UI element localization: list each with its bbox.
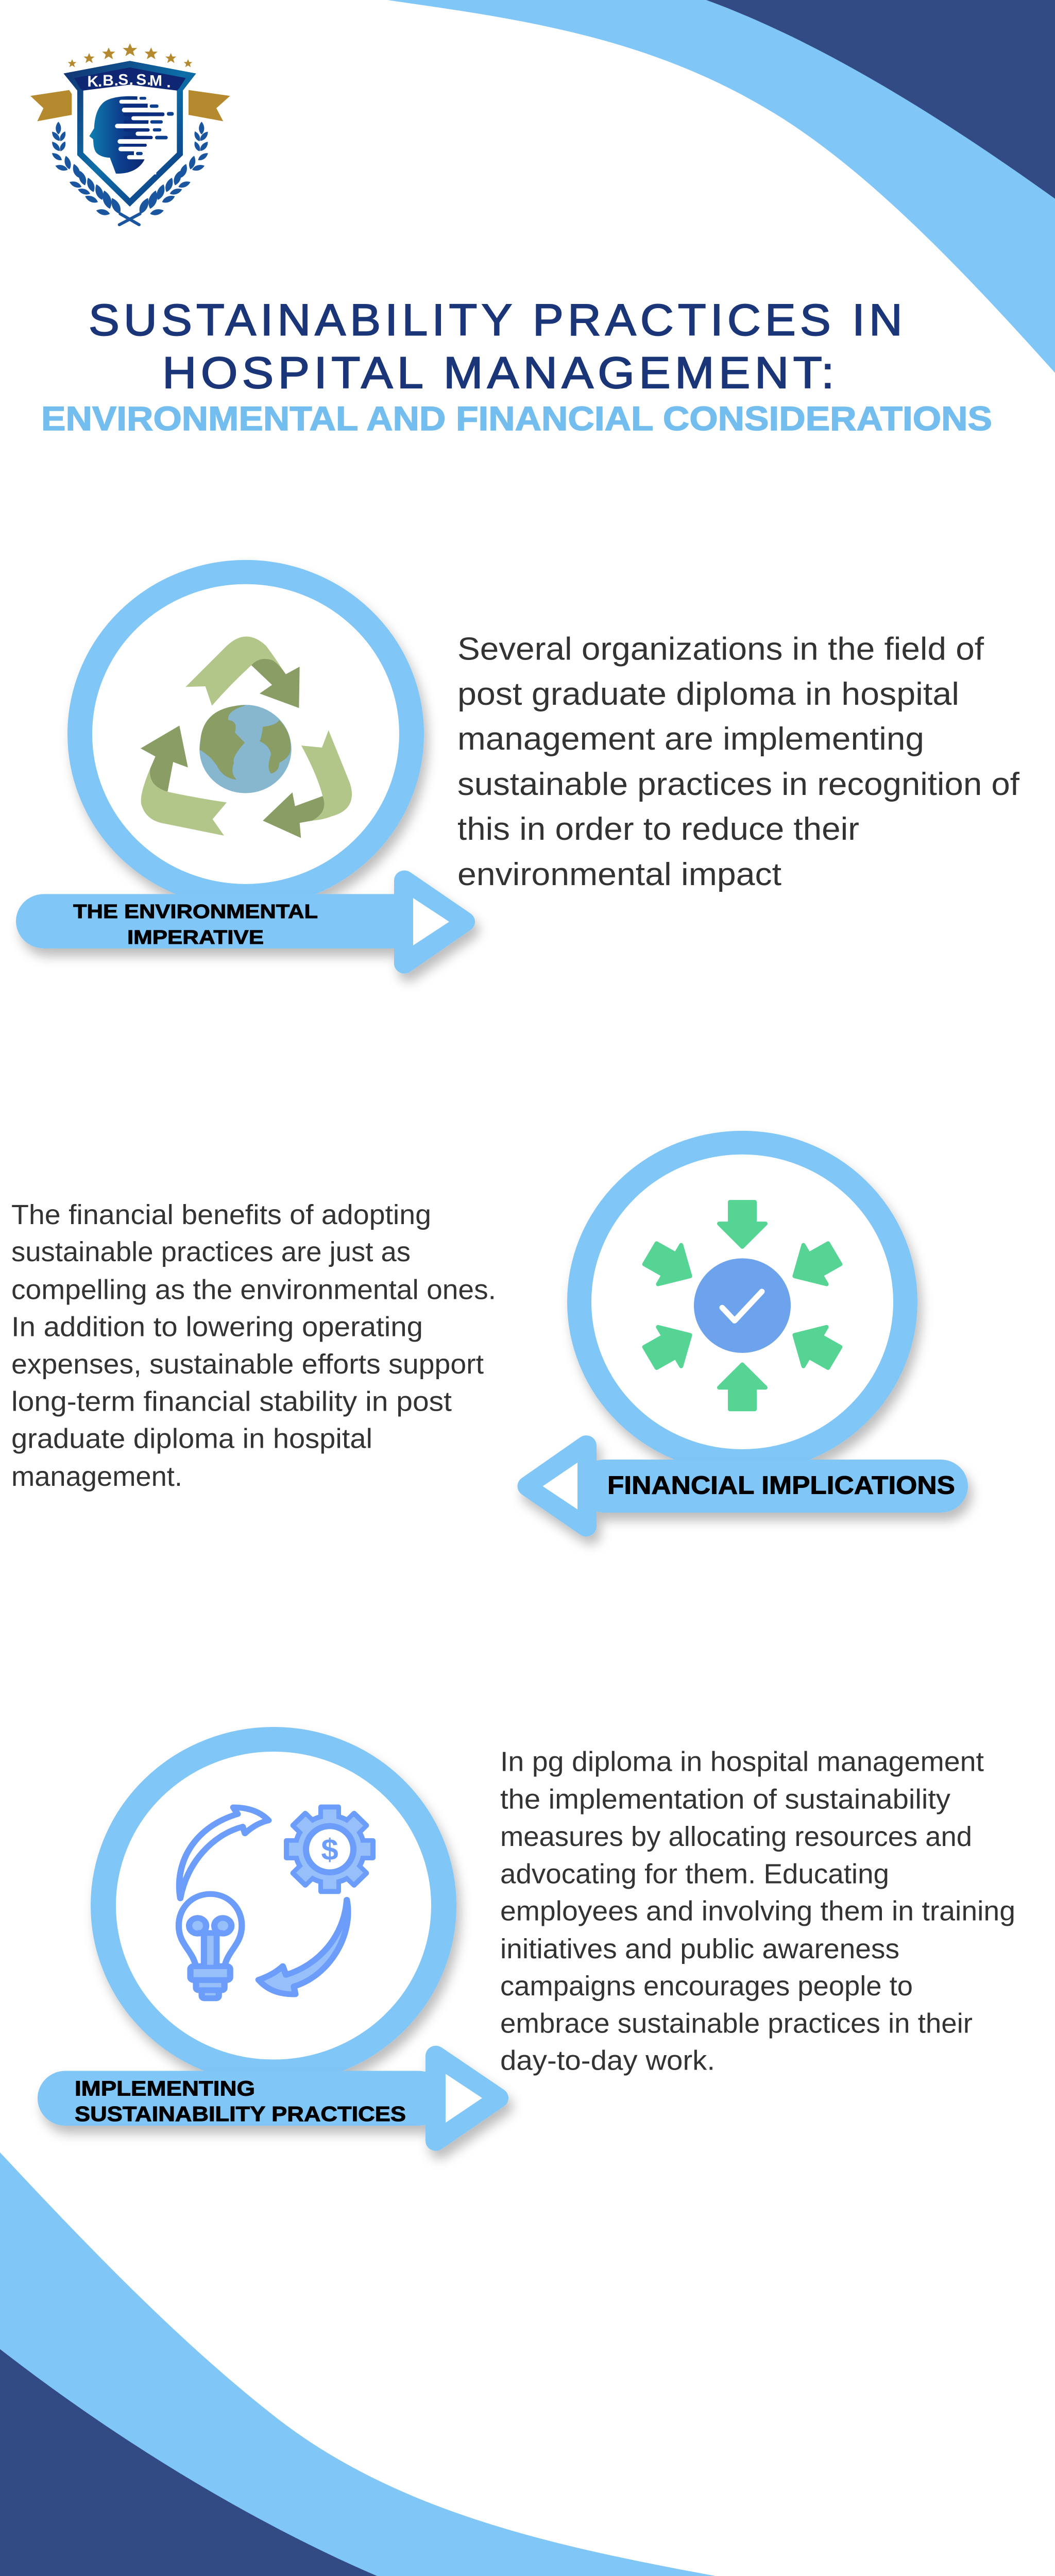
title: SUSTAINABILITY PRACTICES IN [89,295,907,345]
gear with dollar [284,1804,376,1894]
text block 2 [11,1199,496,1492]
circle frame 3 [103,1739,444,2072]
text block 1: environmental impact [457,856,781,892]
text block 3: advocating for them. Educating [500,1858,889,1889]
text block 2: long-term financial stability in post [11,1386,452,1417]
logo shield [63,61,196,207]
label 3 [75,2076,406,2126]
logo: K.B.S.S.M. crest [30,43,230,225]
label 3: SUSTAINABILITY PRACTICES [75,2102,406,2126]
text block 3: employees and involving them in training [500,1895,1015,1926]
text block 1 [457,631,1019,892]
cycle arrows [179,1807,348,1994]
icon: bulb, gear and cycle arrows [179,1804,376,1998]
icon: recycling globe [141,636,352,838]
text block 3: measures by allocating resources and [500,1821,972,1852]
text block 3: initiatives and public awareness [500,1933,899,1964]
text block 3: campaigns encourages people to [500,1971,913,2002]
logo laurel left [50,122,123,216]
text block 3: embrace sustainable practices in their [500,2008,973,2039]
text block 2: expenses, sustainable efforts support [11,1349,484,1380]
bottom-left corner waves [0,2153,716,2576]
text block 1: this in order to reduce their [457,811,859,847]
panel: implementing sustainability practices [38,1739,498,2141]
gear with dollar: $ [321,1833,338,1867]
panel: the environmental imperative [16,572,465,963]
title [89,295,907,398]
title: HOSPITAL MANAGEMENT: [162,348,839,398]
logo laurel right [137,122,210,216]
text block 2: management. [11,1461,182,1492]
text block 3: In pg diploma in hospital management [500,1746,984,1777]
circle frame 1 [80,572,412,896]
text block 1: Several organizations in the field of [457,631,984,667]
text block 3 [500,1746,1015,2076]
arrow banner 1 [16,880,465,963]
label 1 [73,901,318,948]
text block 2: graduate diploma in hospital [11,1423,372,1454]
text block 1: post graduate diploma in hospital [457,676,959,712]
text block 2: The financial benefits of adopting [11,1199,431,1230]
bulb [179,1894,242,1998]
subtitle: ENVIRONMENTAL AND FINANCIAL CONSIDERATIONS [41,400,992,438]
text block 2: In addition to lowering operating [11,1311,423,1343]
panel: financial implications [528,1143,968,1527]
label 2: FINANCIAL IMPLICATIONS [607,1471,955,1499]
icon: converging arrows with check [639,1202,846,1409]
logo stars [68,43,192,67]
text block 3: day-to-day work. [500,2045,715,2076]
top-right corner waves [387,0,1055,373]
logo wordmark: K.B.S.S.M. [87,72,171,91]
logo laurel crossing [120,214,140,225]
text block 3: the implementation of sustainability [500,1784,951,1815]
arrow banner 3 [38,2056,498,2141]
circle frame 2 [579,1143,906,1461]
text block 1: sustainable practices in recognition of [457,767,1019,802]
logo head [89,96,174,175]
text block 1: management are implementing [457,721,924,757]
text block 2: compelling as the environmental ones. [11,1274,496,1305]
label 3: IMPLEMENTING [75,2076,255,2100]
text block 2: sustainable practices are just as [11,1236,411,1267]
label 1: IMPERATIVE [127,926,264,948]
label 1: THE ENVIRONMENTAL [73,901,318,923]
logo ribbons [30,90,230,121]
arrow banner 2 [528,1446,968,1527]
